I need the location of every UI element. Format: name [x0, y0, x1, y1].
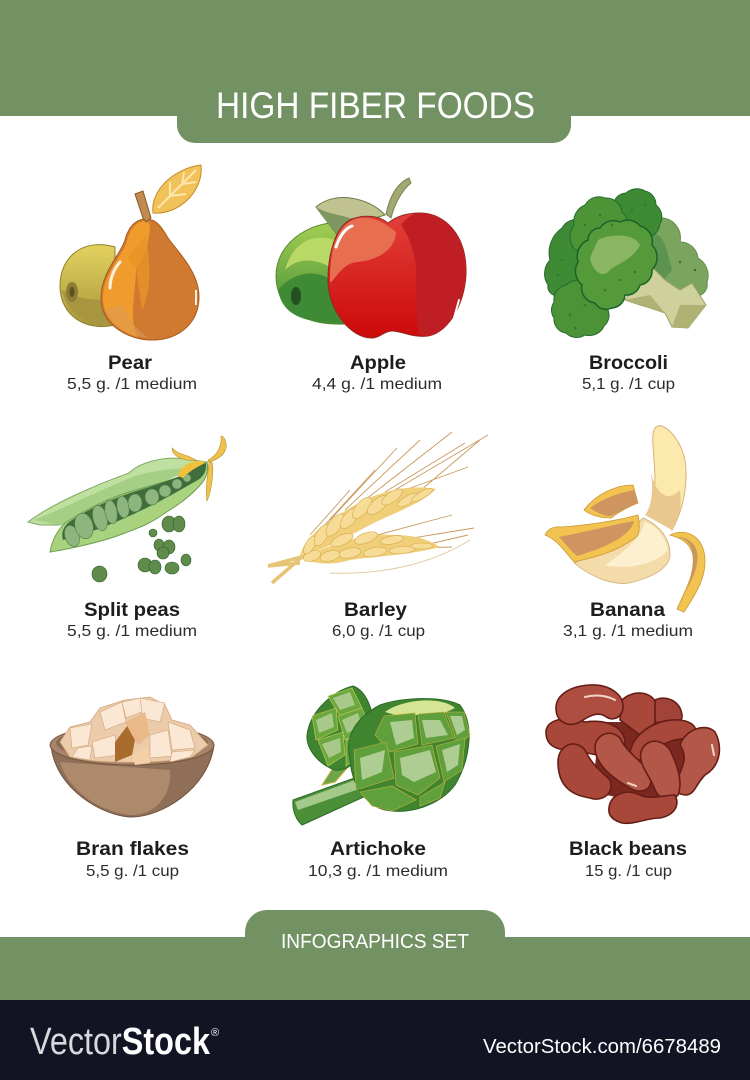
- panel: pear: [60, 165, 201, 393]
- label: Pear: Pear: [108, 353, 153, 374]
- title: HIGH FIBER FOODS: [216, 85, 535, 126]
- icon: broccoli: [545, 189, 708, 337]
- panel: barley: [268, 432, 488, 640]
- panel: black beans: [546, 685, 719, 880]
- value: Split peas: 5,5 g. /1 medium: [67, 623, 197, 640]
- icon: banana: [545, 426, 705, 612]
- value: Broccoli: 5,1 g. /1 cup: [582, 376, 675, 393]
- logo mark: registered: ®: [211, 1027, 219, 1039]
- label: Apple: Apple: [350, 353, 406, 374]
- value: Barley: 6,0 g. /1 cup: [332, 623, 425, 640]
- value: Bran flakes: 5,5 g. /1 cup: [86, 863, 179, 880]
- image id: VectorStock.com/6678489: [483, 1036, 721, 1058]
- label: Bran flakes: Bran flakes: [76, 839, 189, 860]
- icon: artichoke: [293, 686, 470, 825]
- icon: split peas: [28, 436, 226, 582]
- icon: black beans: [546, 685, 719, 823]
- value: Artichoke: 10,3 g. /1 medium: [308, 863, 448, 880]
- value: Apple: 4,4 g. /1 medium: [312, 376, 442, 393]
- icon: barley: [268, 432, 488, 583]
- logo: VectorStock: VectorStock: [30, 1021, 211, 1063]
- icon: pear: [60, 165, 201, 340]
- label: Black beans: Black beans: [569, 839, 687, 860]
- icon: apple: [276, 178, 466, 338]
- value: Banana: 3,1 g. /1 medium: [563, 623, 693, 640]
- label: Barley: Barley: [344, 600, 407, 621]
- footer band: [0, 910, 750, 1000]
- panel: split peas: [28, 436, 226, 640]
- panel: artichoke: [293, 686, 470, 880]
- label: Split peas: Split peas: [84, 600, 180, 621]
- value: Pear: 5,5 g. /1 medium: [67, 376, 197, 393]
- label: Broccoli: Broccoli: [589, 353, 668, 374]
- value: Black beans: 15 g. /1 cup: [585, 863, 672, 880]
- label: Banana: Banana: [590, 600, 665, 621]
- label: Artichoke: Artichoke: [330, 839, 426, 860]
- watermark bar: [0, 1000, 750, 1080]
- panel: apple: [276, 178, 466, 393]
- panel: broccoli: [545, 189, 708, 393]
- footer label: INFOGRAPHICS SET: [281, 931, 469, 953]
- header band: [0, 0, 750, 143]
- panel: bran flakes: [50, 697, 214, 880]
- panel: banana: [545, 426, 705, 640]
- icon: bran flakes: [50, 697, 214, 817]
